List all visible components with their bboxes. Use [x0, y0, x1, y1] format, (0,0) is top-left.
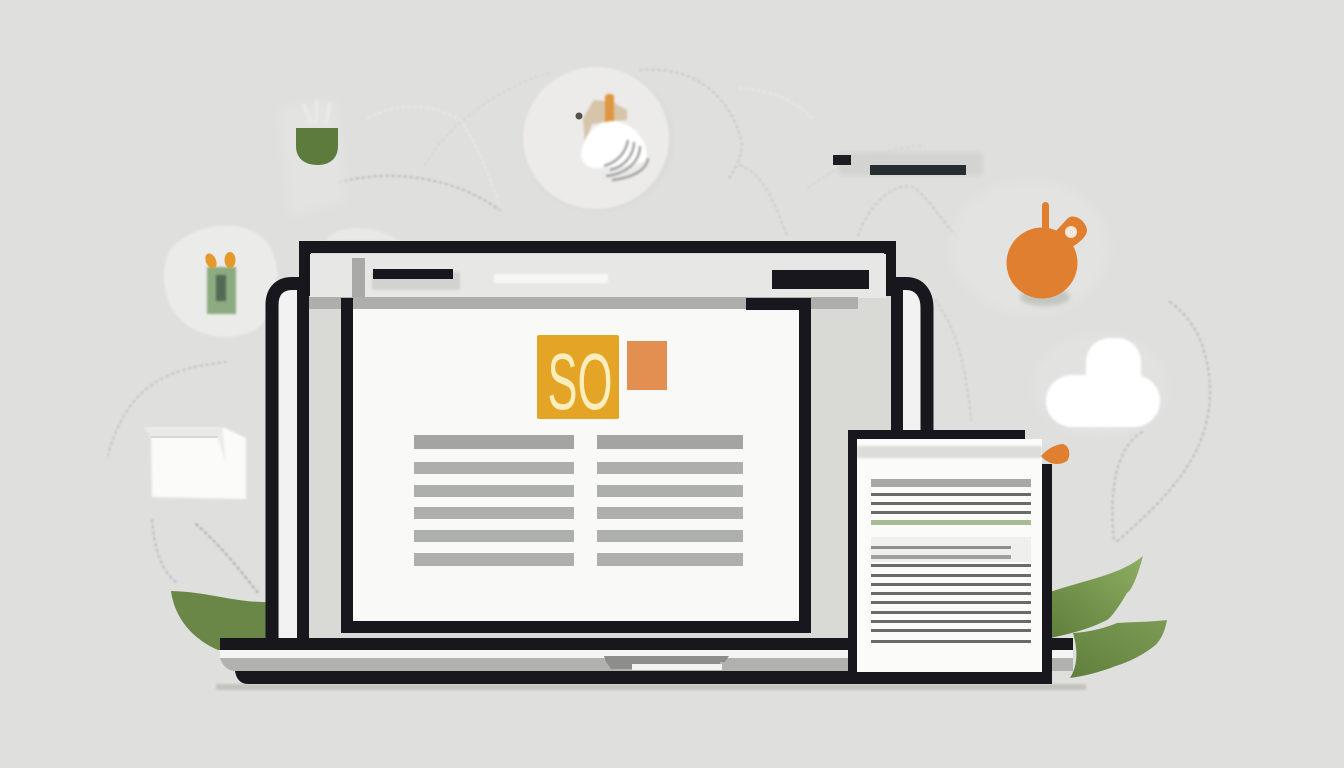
document page — [848, 434, 1069, 684]
left leaf — [171, 591, 270, 650]
document text lines — [871, 479, 1031, 643]
upper right leaf — [1050, 556, 1143, 638]
icon: cloud — [1034, 335, 1166, 435]
document corner tab — [1041, 444, 1069, 464]
screen table right column — [597, 435, 743, 566]
dotted connector lines — [108, 70, 1210, 594]
icon: bubble with green card and orange tips — [164, 226, 398, 337]
icon: pen bar — [833, 152, 983, 176]
icon: green cup — [280, 100, 345, 215]
icon: white note card — [144, 428, 246, 499]
orange square — [627, 341, 667, 390]
laptop lid frame — [303, 247, 897, 640]
right back strip — [903, 290, 921, 432]
screen table left column — [414, 435, 574, 566]
lower right leaf — [1070, 620, 1167, 678]
browser title bar — [309, 254, 886, 309]
laptop base — [216, 638, 1086, 690]
left back strip — [279, 290, 297, 640]
icon: bubble with swan-like figure — [522, 67, 674, 212]
laptop screen — [341, 298, 805, 627]
logo: SO: SO — [548, 337, 612, 426]
laptop back body — [272, 247, 927, 640]
logo: SO — [537, 335, 619, 426]
trackpad notch — [604, 656, 729, 669]
icon: orange fruit with tag — [952, 181, 1108, 313]
